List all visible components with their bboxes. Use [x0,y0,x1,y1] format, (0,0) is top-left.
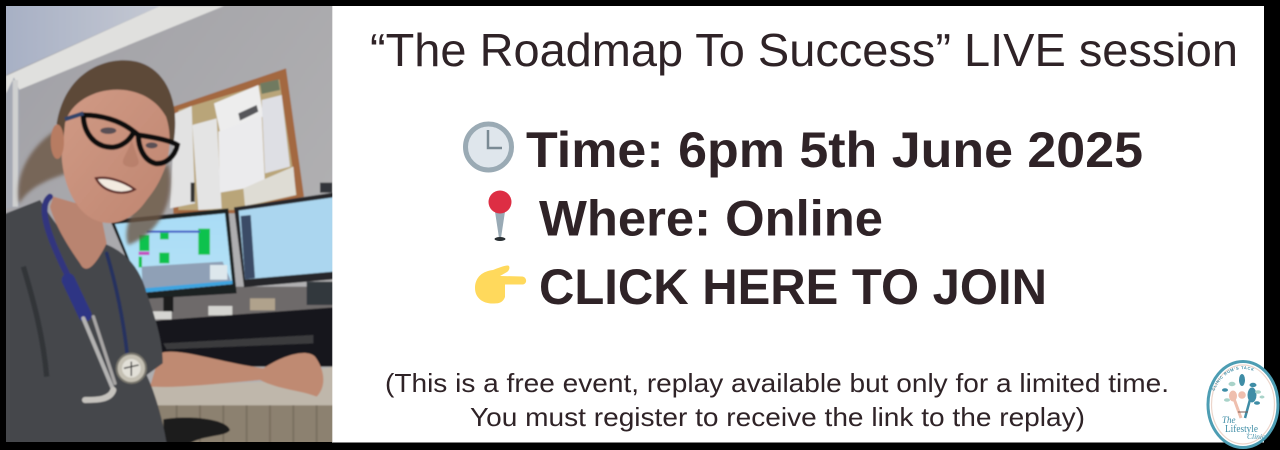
hair crown [56,60,176,142]
loose hair wisps [18,130,72,203]
chair arm [163,418,230,443]
glasses [83,115,177,164]
monitor left [110,208,237,299]
stethoscope [45,197,127,400]
note: (This is a free event, replay available but only for a limited time. [385,368,1169,398]
icon: pointing hand [475,265,526,304]
call to action: CLICK HERE TO JOIN [539,259,1047,315]
logo: The Lifestyle Clinic [1206,360,1280,449]
where line: Where: Online [539,190,883,246]
desk items [152,311,172,319]
note [385,368,1169,432]
counter [152,367,332,406]
monitor right [234,193,333,287]
photo: clinician at a desk with monitors [0,0,337,447]
nose and eyes [123,140,139,167]
panel: white content [332,6,1264,442]
scrubs [0,200,167,443]
keyboard shelf [155,307,333,367]
smile [96,178,135,193]
ear [51,124,64,159]
logo: The Lifestyle Clinic: CLINIC RUM'S TACK [1212,366,1254,390]
face [62,90,170,223]
arm [150,352,323,397]
time line: Time: 6pm 5th June 2025 [526,122,1143,178]
heading: “The Roadmap To Success” LIVE session [370,24,1238,76]
icon: round pushpin [488,190,512,241]
logo: The Lifestyle Clinic: Lifestyle [1225,423,1258,435]
noticeboard [173,68,304,213]
icon: clock [466,124,512,170]
logo: The Lifestyle Clinic: The [1222,415,1236,425]
note: You must register to receive the link to the replay) [470,402,1085,432]
logo: The Lifestyle Clinic: Clinic [1247,432,1266,441]
neck [50,197,107,269]
